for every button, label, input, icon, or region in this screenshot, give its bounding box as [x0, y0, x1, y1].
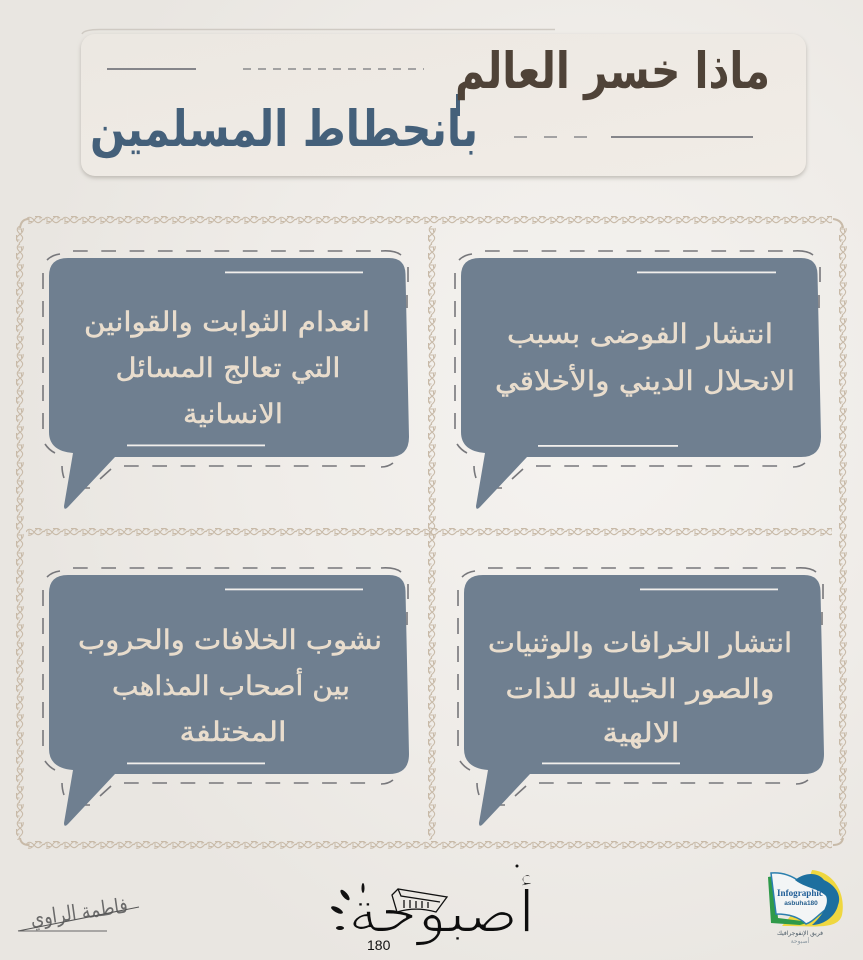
infographic team logo: أصبوحة — [791, 937, 810, 945]
publisher logo — [330, 864, 535, 953]
bubble text: الالهية — [602, 718, 680, 749]
panel: bottom left speech bubble — [43, 568, 409, 826]
bubble text: والصور الخيالية للذات — [506, 674, 774, 705]
dashed outline — [458, 568, 823, 805]
bubble text: انعدام الثوابت والقوانين — [84, 307, 370, 338]
decorative title line: top solid — [107, 68, 196, 70]
heading line one: ماذا خسر العالم — [455, 42, 770, 101]
bubble text: نشوب الخلافات والحروب — [78, 625, 382, 656]
bubble text — [84, 307, 370, 430]
infographic team logo — [768, 870, 843, 945]
bubble text: انتشار الفوضى بسبب — [507, 319, 773, 350]
panel: title banner — [81, 30, 806, 176]
bubble shape — [461, 258, 821, 509]
infographic team logo: فريق الإنفوجرافيك — [777, 930, 823, 937]
heading connecting stroke — [456, 94, 460, 116]
dashed outline — [455, 251, 820, 488]
bubble text: الانسانية — [183, 399, 283, 430]
bubble shape — [49, 258, 409, 509]
infographic team logo: Infographic — [777, 888, 823, 898]
bubble text: الانحلال الديني والأخلاقي — [495, 363, 795, 397]
bubble text — [495, 319, 795, 397]
panel: top right speech bubble — [455, 251, 821, 509]
bubble text: التي تعالج المسائل — [116, 353, 340, 384]
bubble text: المختلفة — [180, 717, 286, 748]
heading line two: بانحطاط المسلمين — [90, 100, 478, 159]
bubble shape — [49, 575, 409, 826]
panel: bottom right speech bubble — [458, 568, 824, 826]
panel: top left speech bubble — [43, 251, 409, 509]
logo number: 180 — [367, 937, 391, 953]
decorative title line: bottom solid — [611, 136, 753, 138]
infographic team logo: asbuha180 — [784, 900, 818, 907]
ornamental chain frame — [15, 215, 848, 850]
icon: open book — [392, 889, 447, 912]
decorative title line: bottom dashed — [514, 136, 587, 138]
bubble text: بين أصحاب المذاهب — [112, 667, 350, 702]
dashed outline — [43, 251, 408, 488]
bubble text — [78, 625, 382, 748]
bubble text — [488, 628, 792, 749]
author signature: فاطمة الراوي — [29, 893, 129, 931]
decorative title line: top dashed — [243, 68, 424, 70]
icon: sun rays — [330, 864, 518, 930]
publisher logo: أصبوحة — [348, 874, 535, 947]
bubble text: انتشار الخرافات والوثنيات — [488, 628, 792, 659]
dashed outline — [43, 568, 408, 805]
bubble shape — [464, 575, 824, 826]
